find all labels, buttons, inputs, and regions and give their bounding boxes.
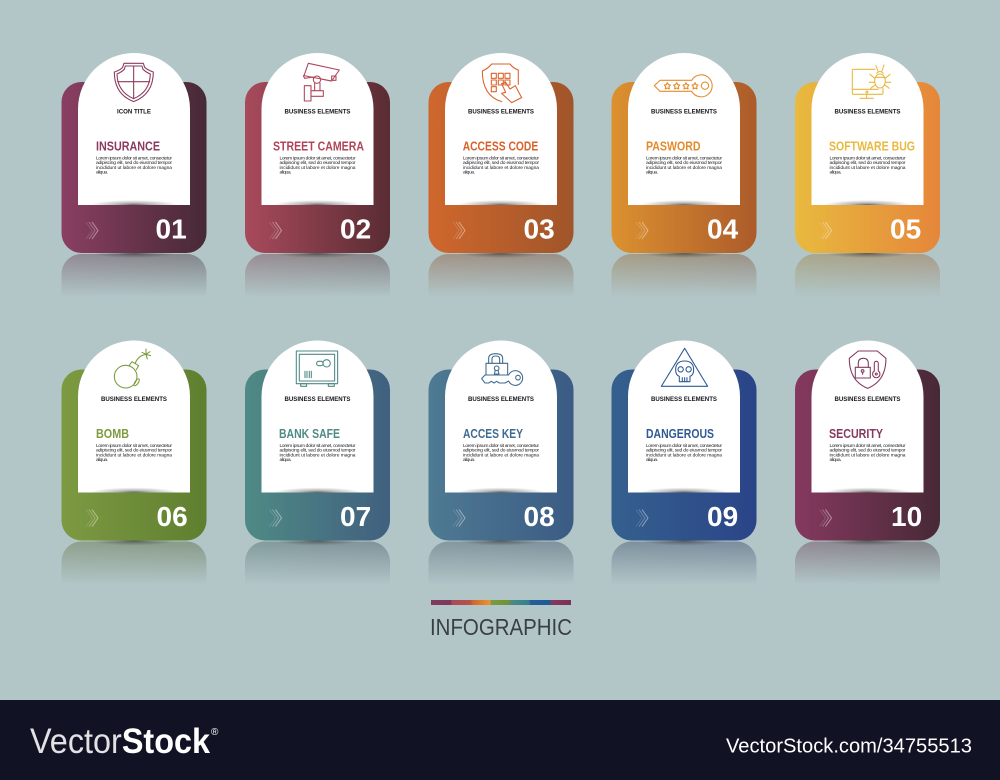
arch inner shadow xyxy=(827,488,908,492)
arch inner shadow xyxy=(644,200,725,205)
white arch xyxy=(812,53,924,205)
arch inner shadow xyxy=(643,488,724,492)
body text: incididunt ut labore et dolore magna xyxy=(830,165,906,171)
number: 01 xyxy=(156,214,187,244)
body text: Lorem ipsum dolor sit amet, consectetur xyxy=(96,443,172,449)
colour bar xyxy=(431,600,571,605)
heading: STREET CAMERA xyxy=(273,140,364,154)
image id: VectorStock.com/34755513 xyxy=(726,736,972,758)
card body xyxy=(612,370,756,540)
body text xyxy=(646,443,722,463)
heading: ACCESS CODE xyxy=(463,140,538,154)
card 05: software bug xyxy=(795,53,940,314)
subtitle: BUSINESS ELEMENTS xyxy=(834,109,901,116)
body text: Lorem ipsum dolor sit amet, consectetur xyxy=(646,443,722,449)
body text: adipiscing elit, sed do eiusmod tempor xyxy=(463,448,539,454)
logo wordmark: VectorStock xyxy=(30,722,210,761)
body text xyxy=(280,443,356,463)
arch inner shadow xyxy=(826,200,908,205)
arch inner shadow xyxy=(460,200,542,205)
body text: incididunt ut labore et dolore magna xyxy=(96,165,172,171)
card drop shadow xyxy=(830,540,906,545)
subtitle: BUSINESS ELEMENTS xyxy=(284,109,351,116)
body text xyxy=(96,443,172,463)
body text: Lorem ipsum dolor sit amet, consectetur xyxy=(830,443,906,449)
reflection xyxy=(62,542,206,579)
body text xyxy=(830,155,906,176)
chevrons xyxy=(86,510,98,526)
card drop shadow xyxy=(463,540,539,545)
body text: incididunt ut labore et dolore magna xyxy=(463,452,539,458)
number: 10 xyxy=(891,501,922,532)
icon: street camera xyxy=(303,63,339,101)
chevrons xyxy=(820,222,832,239)
subtitle: BUSINESS ELEMENTS xyxy=(101,396,168,403)
white arch xyxy=(628,340,740,492)
body text: adipiscing elit, sed do eiusmod tempor xyxy=(280,160,356,166)
body text: adipiscing elit, sed do eiusmod tempor xyxy=(96,448,172,454)
card 08: access key xyxy=(428,340,574,602)
reflection xyxy=(62,254,206,292)
reflection xyxy=(428,254,574,292)
chevrons xyxy=(636,222,648,239)
icon: software bug xyxy=(852,65,891,98)
body text: aliqua. xyxy=(96,170,108,176)
chevrons xyxy=(636,510,648,526)
heading: ACCES KEY xyxy=(463,427,524,441)
arch inner shadow xyxy=(277,488,358,492)
icon: shield keypad xyxy=(482,64,522,103)
body text: aliqua. xyxy=(463,457,475,463)
body text: aliqua. xyxy=(830,170,842,176)
number: 04 xyxy=(707,214,739,244)
body text: Lorem ipsum dolor sit amet, consectetur xyxy=(646,155,722,161)
white arch xyxy=(445,53,557,205)
subtitle: BUSINESS ELEMENTS xyxy=(468,109,535,116)
heading: SOFTWARE BUG xyxy=(829,140,915,154)
card 04: password xyxy=(612,53,756,314)
arch inner shadow xyxy=(93,488,174,492)
chevrons xyxy=(86,222,98,239)
arch inner shadow xyxy=(276,200,358,205)
body text: adipiscing elit, sed do eiusmod tempor xyxy=(830,160,906,166)
body text: aliqua. xyxy=(280,457,292,463)
number: 08 xyxy=(524,501,555,532)
card body xyxy=(62,82,206,253)
body text: incididunt ut labore et dolore magna xyxy=(96,452,172,458)
subtitle: BUSINESS ELEMENTS xyxy=(468,396,535,403)
card 09: dangerous xyxy=(612,340,756,602)
icon: security shield xyxy=(849,351,886,388)
body text xyxy=(280,155,356,176)
card drop shadow xyxy=(463,253,539,258)
reflection xyxy=(245,542,390,578)
heading: SECURITY xyxy=(829,427,884,441)
icon: shield xyxy=(114,63,153,102)
number: 03 xyxy=(524,214,555,244)
white arch xyxy=(78,53,190,205)
registered mark: ® xyxy=(211,727,219,738)
body text: incididunt ut labore et dolore magna xyxy=(463,165,539,171)
reflection xyxy=(245,254,390,292)
icon: skull warning xyxy=(661,348,708,386)
body text: Lorem ipsum dolor sit amet, consectetur xyxy=(830,155,906,161)
subtitle: BUSINESS ELEMENTS xyxy=(284,396,351,403)
icon: bank safe xyxy=(296,351,338,386)
card drop shadow xyxy=(646,540,722,545)
body text: aliqua. xyxy=(646,170,658,176)
card body xyxy=(795,370,940,540)
body text xyxy=(463,155,539,176)
card drop shadow xyxy=(646,253,722,258)
card 02: street camera xyxy=(245,53,390,314)
card drop shadow xyxy=(830,253,906,258)
body text: incididunt ut labore et dolore magna xyxy=(646,165,722,171)
body text: Lorem ipsum dolor sit amet, consectetur xyxy=(280,155,356,161)
white arch xyxy=(628,53,740,205)
white arch xyxy=(445,340,557,492)
number: 02 xyxy=(340,214,371,244)
body text xyxy=(96,155,172,176)
card 01: insurance xyxy=(62,53,206,314)
arch inner shadow xyxy=(460,488,542,492)
card drop shadow xyxy=(280,540,356,545)
heading: BOMB xyxy=(96,427,129,441)
subtitle: BUSINESS ELEMENTS xyxy=(651,396,718,403)
card 03: access code xyxy=(428,53,574,314)
card drop shadow xyxy=(96,540,172,545)
reflection xyxy=(612,254,756,292)
body text xyxy=(463,443,539,463)
card body xyxy=(428,82,574,253)
body text: incididunt ut labore et dolore magna xyxy=(280,452,356,458)
number: 06 xyxy=(156,501,188,532)
chevrons xyxy=(820,510,832,526)
heading: INSURANCE xyxy=(96,140,160,154)
card body xyxy=(245,82,390,253)
white arch xyxy=(812,340,924,492)
heading: BANK SAFE xyxy=(279,427,340,441)
icon title: ICON TITLE xyxy=(117,109,152,116)
body text: adipiscing elit, sed do eiusmod tempor xyxy=(646,160,722,166)
reflection xyxy=(795,542,940,579)
body text: Lorem ipsum dolor sit amet, consectetur xyxy=(463,443,539,449)
number: 07 xyxy=(340,501,371,532)
body text: Lorem ipsum dolor sit amet, consectetur xyxy=(463,155,539,161)
heading: DANGEROUS xyxy=(646,427,714,441)
body text xyxy=(646,155,722,176)
number: 05 xyxy=(890,214,921,244)
body text: adipiscing elit, sed do eiusmod tempor xyxy=(96,160,172,166)
body text: incididunt ut labore et dolore magna xyxy=(646,452,722,458)
body text: incididunt ut labore et dolore magna xyxy=(830,452,906,458)
card body xyxy=(245,370,390,540)
body text: adipiscing elit, sed do eiusmod tempor xyxy=(830,448,906,454)
reflection xyxy=(795,254,940,292)
white arch xyxy=(78,340,190,492)
subtitle: BUSINESS ELEMENTS xyxy=(834,396,901,403)
card body xyxy=(795,82,940,253)
chevrons xyxy=(270,510,282,526)
card 06: bomb xyxy=(62,340,206,602)
footer band xyxy=(0,700,1000,780)
body text: aliqua. xyxy=(280,170,292,176)
chevrons xyxy=(453,222,465,239)
card body xyxy=(62,370,206,540)
card drop shadow xyxy=(280,253,356,258)
card 10: security xyxy=(795,340,940,602)
body text: incididunt ut labore et dolore magna xyxy=(280,165,356,171)
icon: password key xyxy=(654,75,712,97)
white arch xyxy=(262,340,374,492)
infographic label: INFOGRAPHIC xyxy=(430,614,572,640)
body text xyxy=(830,443,906,463)
body text: aliqua. xyxy=(96,457,108,463)
heading: PASWORD xyxy=(646,140,700,154)
card 07: bank safe xyxy=(245,340,390,602)
arch inner shadow xyxy=(94,200,175,205)
body text: Lorem ipsum dolor sit amet, consectetur xyxy=(96,155,172,161)
body text: adipiscing elit, sed do eiusmod tempor xyxy=(463,160,539,166)
reflection xyxy=(612,542,756,579)
body text: Lorem ipsum dolor sit amet, consectetur xyxy=(280,443,356,449)
body text: adipiscing elit, sed do eiusmod tempor xyxy=(646,448,722,454)
icon: bomb xyxy=(114,349,151,388)
card body xyxy=(612,82,756,253)
reflection xyxy=(428,542,574,578)
body text: aliqua. xyxy=(646,457,658,463)
card drop shadow xyxy=(96,253,172,258)
card body xyxy=(428,370,574,540)
subtitle: BUSINESS ELEMENTS xyxy=(651,109,718,116)
white arch xyxy=(262,53,374,205)
chevrons xyxy=(453,510,465,526)
body text: aliqua. xyxy=(830,457,842,463)
chevrons xyxy=(270,222,282,239)
body text: aliqua. xyxy=(463,170,475,176)
number: 09 xyxy=(707,501,738,532)
body text: adipiscing elit, sed do eiusmod tempor xyxy=(280,448,356,454)
icon: lock and key xyxy=(482,354,523,385)
